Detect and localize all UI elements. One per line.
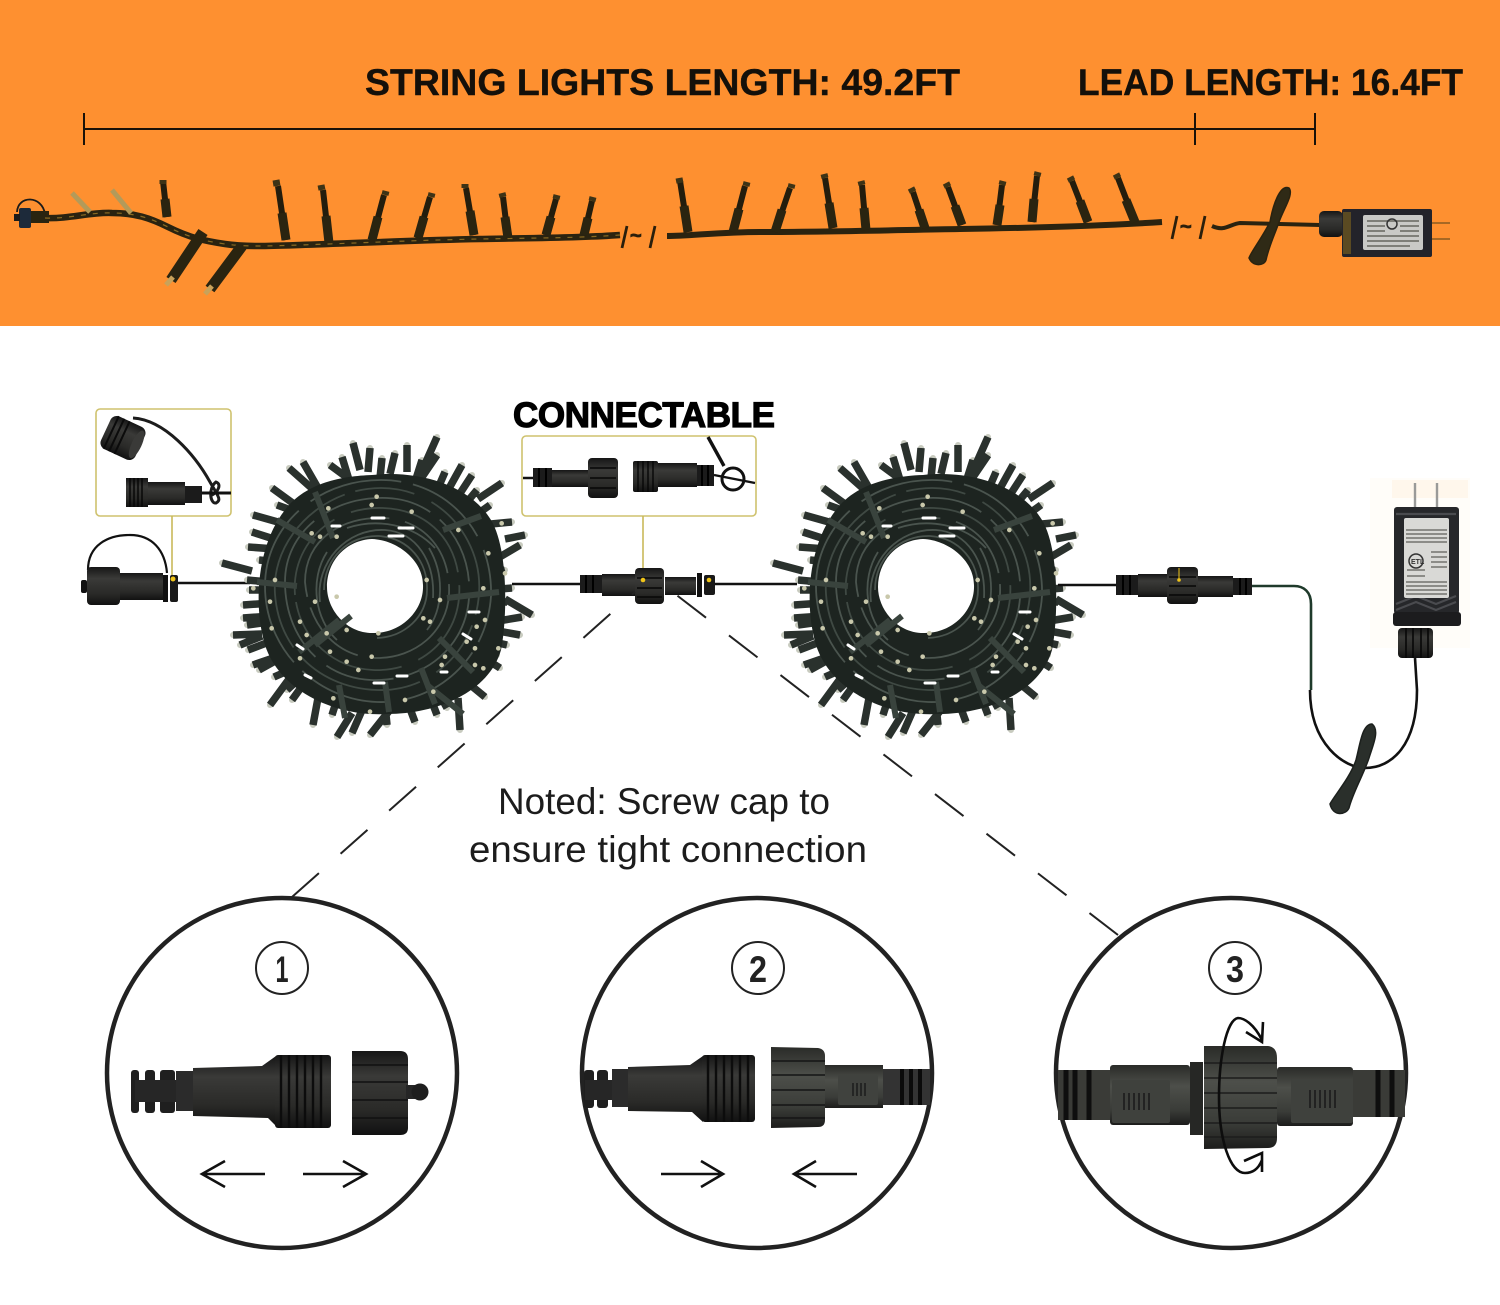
- power lead cable: [1252, 586, 1417, 814]
- hanging bulb stems: [171, 232, 242, 289]
- break mark 1: [622, 225, 655, 248]
- panel: step 1: [107, 898, 457, 1248]
- heading: lead length: LEAD LENGTH: 16.4FT: [1078, 62, 1463, 103]
- plug adapter: ETL: [1411, 559, 1425, 566]
- step number 2: [732, 942, 784, 994]
- twisted wire: [667, 222, 1162, 236]
- leader line to end connector: [171, 516, 173, 578]
- note text: ensure tight connection: [469, 829, 867, 870]
- break mark 2: ~: [1180, 216, 1192, 238]
- wire and middle connector: [512, 568, 797, 604]
- dashed callout lines: [292, 590, 1118, 935]
- connected connector: [1058, 1046, 1405, 1149]
- connector plug: [131, 1055, 331, 1128]
- break mark 1: ~: [630, 225, 642, 247]
- heading: string lights length: STRING LIGHTS LENGTH: 49.2FT: [365, 62, 960, 103]
- end connector on wire: [81, 535, 250, 605]
- step number 1: [256, 942, 308, 994]
- dimension line: [84, 113, 1315, 145]
- inset: cap and connector detail: [96, 409, 231, 516]
- inset: connector pair detail: [522, 436, 756, 516]
- step number 1: 1: [276, 949, 288, 990]
- string lights strand: first segment: [14, 180, 620, 294]
- screw cap: [98, 414, 149, 463]
- adapter glow: [1370, 478, 1470, 648]
- light string coil 2: [773, 437, 1083, 737]
- arrows apart: [202, 1161, 366, 1187]
- lead wire and coil: [1212, 188, 1320, 265]
- step number 3: 3: [1226, 949, 1244, 990]
- note text: [469, 781, 867, 870]
- main twisted wire: [45, 213, 620, 246]
- adapter screw cap: [1398, 628, 1433, 658]
- end connector with cap: [14, 199, 49, 228]
- step number 2: 2: [749, 949, 767, 990]
- adapter body: [1394, 507, 1459, 614]
- connector plug: [126, 478, 148, 507]
- heading: connectable: CONNECTABLE: [513, 396, 775, 435]
- break mark 2: [1172, 216, 1205, 239]
- plug adapter: [1393, 483, 1461, 658]
- bulb stems: [680, 176, 1135, 232]
- faded bulbs at start: [72, 190, 131, 213]
- leader line to middle connector: [642, 516, 644, 580]
- rotation arrow: [1219, 1018, 1263, 1173]
- panel: step 2: [582, 898, 932, 1248]
- note text: Noted: Screw cap to: [498, 781, 830, 822]
- plug adapter: [1319, 209, 1450, 257]
- step number 3: [1209, 942, 1261, 994]
- adapter prongs: [1415, 483, 1437, 507]
- bulb tips: [163, 180, 593, 201]
- wire and right connector: [1058, 567, 1252, 604]
- orange header band: [0, 0, 1500, 326]
- bulb tips: [679, 172, 1118, 192]
- lead wire with plug adapter: [1212, 188, 1450, 265]
- connector right with cap: [771, 1047, 930, 1128]
- adapter label: [1404, 518, 1449, 598]
- connector left: [584, 1055, 755, 1122]
- panel: step 3: [1056, 898, 1406, 1248]
- upright bulb stems: [163, 181, 592, 243]
- screw cap: [352, 1051, 428, 1135]
- arrows together: [661, 1161, 857, 1187]
- string lights strand: second segment: [667, 172, 1162, 236]
- light string coil 1: [222, 437, 532, 737]
- cap strap: [133, 418, 219, 503]
